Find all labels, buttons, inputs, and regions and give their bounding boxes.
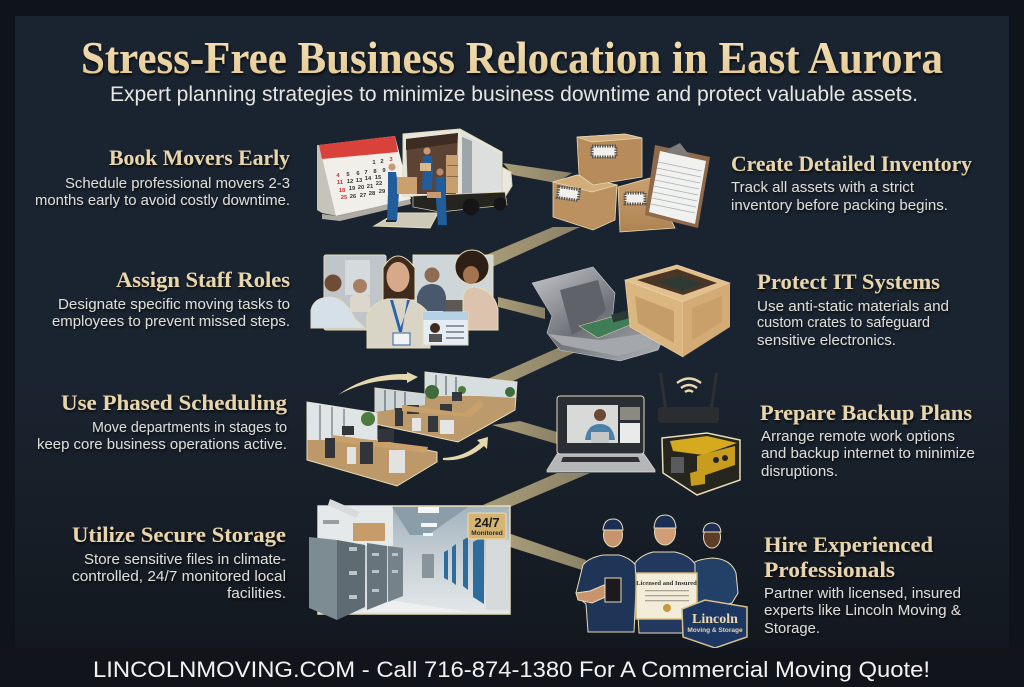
text block: Assign Staff Roles [52,267,290,330]
text block: Utilize Secure Storage: controlled, 24/7 monitored local [72,569,286,585]
illustration: wooden crate [625,265,730,357]
text block: Book Movers Early: Schedule professional movers 2-3 [65,176,290,192]
lift gate [374,213,438,228]
illustration: wifi router [658,373,719,423]
wheels [462,198,506,216]
connector ribbons [483,163,590,570]
logo badge [682,600,747,648]
subtitle: Expert planning strategies to minimize business downtime and protect valuable assets. [110,82,918,106]
illustration: moving crew with certificate: Licensed and Insured [636,580,697,587]
calendar dates: 13 [356,178,363,184]
text block: Book Movers Early: months early to avoid costly downtime. [35,193,290,209]
office panel left [324,255,386,330]
illustration: calendar [317,136,411,221]
illustration: moving crew with certificate: Lincoln [692,612,738,627]
cardboard boxes [553,134,675,232]
calendar dates: 4 [336,173,340,179]
text block: Hire Experienced Professionals: experts like Lincoln Moving & [764,603,961,619]
text block: Protect IT Systems: sensitive electronics. [757,333,896,349]
text block: Prepare Backup Plans: and backup internet to minimize [761,446,975,462]
filing cabinets [309,537,337,620]
office far [375,372,517,442]
text block: Create Detailed Inventory [731,151,973,214]
text block: Use Phased Scheduling: Move departments in stages to [92,420,287,436]
text block: Hire Experienced Professionals: Hire Experienced [764,532,933,557]
illustration: generator [662,433,740,495]
text block: Book Movers Early: Book Movers Early [109,145,291,170]
text block: Assign Staff Roles: Assign Staff Roles [116,267,290,292]
text block: Create Detailed Inventory: inventory before packing begins. [731,198,948,214]
text block: Use Phased Scheduling: keep core business operations active. [37,437,287,453]
arrow bottom [443,437,488,460]
woman right [455,250,489,284]
calendar dates: 21 [367,184,374,190]
text block: Prepare Backup Plans [760,400,975,480]
text block: Prepare Backup Plans: disruptions. [761,464,838,480]
calendar dates: 28 [369,191,376,197]
calendar dates: 20 [358,185,364,191]
calendar dates: 8 [373,169,377,175]
calendar dates: 15 [375,175,382,181]
mover left [576,519,637,632]
calendar dates: 26 [350,194,357,200]
text block: Hire Experienced Professionals: Storage. [764,621,820,637]
calendar dates: 27 [360,193,366,199]
mover center [635,515,695,633]
text block: Hire Experienced Professionals: Partner with licensed, insured [764,586,961,602]
security camera [323,499,360,524]
illustration: moving crew with certificate [576,515,747,648]
calendar dates: 12 [347,179,353,185]
illustration: phased office floors [307,372,517,486]
title: Stress-Free Business Relocation in East Aurora [81,32,943,83]
barcodes [557,146,645,204]
text block: Hire Experienced Professionals: Professionals [764,557,895,582]
calendar dates: 11 [337,180,344,186]
illustration: storage facility [309,499,510,620]
calendar dates: 1 [372,160,376,166]
blue storage doors [444,536,484,604]
footer call to action: LINCOLNMOVING.COM - Call 716-874-1380 For A Commercial Moving Quote! [93,657,930,682]
clipboard [645,145,710,228]
arrow top [338,372,418,395]
calendar dates: 22 [376,181,382,187]
calendar dates: 14 [365,176,372,182]
24/7 sign [468,513,506,539]
calendar dates: 29 [379,189,386,195]
illustration: storage facility: Monitored [471,530,503,537]
woman center [367,256,430,348]
calendar dates: 6 [356,171,360,177]
illustration: staff team [311,250,498,348]
ID badge [423,312,468,345]
text block: Protect IT Systems [757,269,949,349]
calendar dates: 2 [380,159,384,165]
text block: Prepare Backup Plans: Arrange remote work options [761,429,955,445]
illustration: moving truck with workers [374,129,512,228]
illustration: anti-static bag with circuit board [532,267,667,361]
carton [353,523,385,541]
text block: Protect IT Systems: custom crates to safeguard [757,315,930,331]
text block: Utilize Secure Storage: Store sensitive files in climate- [84,552,286,568]
illustration: storage facility: 24/7 [474,515,500,530]
illustration: laptop video call [547,396,655,472]
workers [387,147,447,225]
certificate [636,573,697,619]
text block: Assign Staff Roles: Designate specific moving tasks to [58,297,290,313]
footer bar [0,648,1024,687]
ceiling lights [418,507,439,536]
calendar dates: 18 [339,188,346,194]
text block: Assign Staff Roles: employees to prevent missed steps. [52,314,290,330]
illustration: moving crew with certificate: Moving & Storage [687,627,743,634]
wifi symbol [677,378,701,392]
calendar dates: 9 [382,168,386,174]
text block: Use Phased Scheduling: Use Phased Scheduling [61,390,288,415]
text block: Hire Experienced Professionals [764,532,961,637]
calendar dates: 25 [341,195,348,201]
calendar dates [336,157,393,201]
office panel right [413,255,493,330]
chassis [413,192,507,212]
illustration: boxes and clipboard [553,134,710,232]
text block: Create Detailed Inventory: Create Detailed Inventory [731,151,973,176]
text block: Utilize Secure Storage [72,522,286,602]
text block: Utilize Secure Storage: facilities. [227,586,286,602]
calendar dates: 3 [389,157,393,163]
calendar dates: 7 [364,170,368,176]
text block: Protect IT Systems: Use anti-static materials and [757,299,949,315]
office near [307,402,437,486]
text block: Prepare Backup Plans: Prepare Backup Plans [760,400,972,425]
text block: Create Detailed Inventory: Track all assets with a strict [731,180,914,196]
text block: Protect IT Systems: Protect IT Systems [757,269,940,294]
mover right [693,523,738,609]
text block: Book Movers Early [35,145,291,209]
calendar dates: 5 [346,172,350,178]
calendar dates: 19 [349,186,356,192]
text block: Use Phased Scheduling [37,390,288,453]
text block: Utilize Secure Storage: Utilize Secure Storage [72,522,286,547]
